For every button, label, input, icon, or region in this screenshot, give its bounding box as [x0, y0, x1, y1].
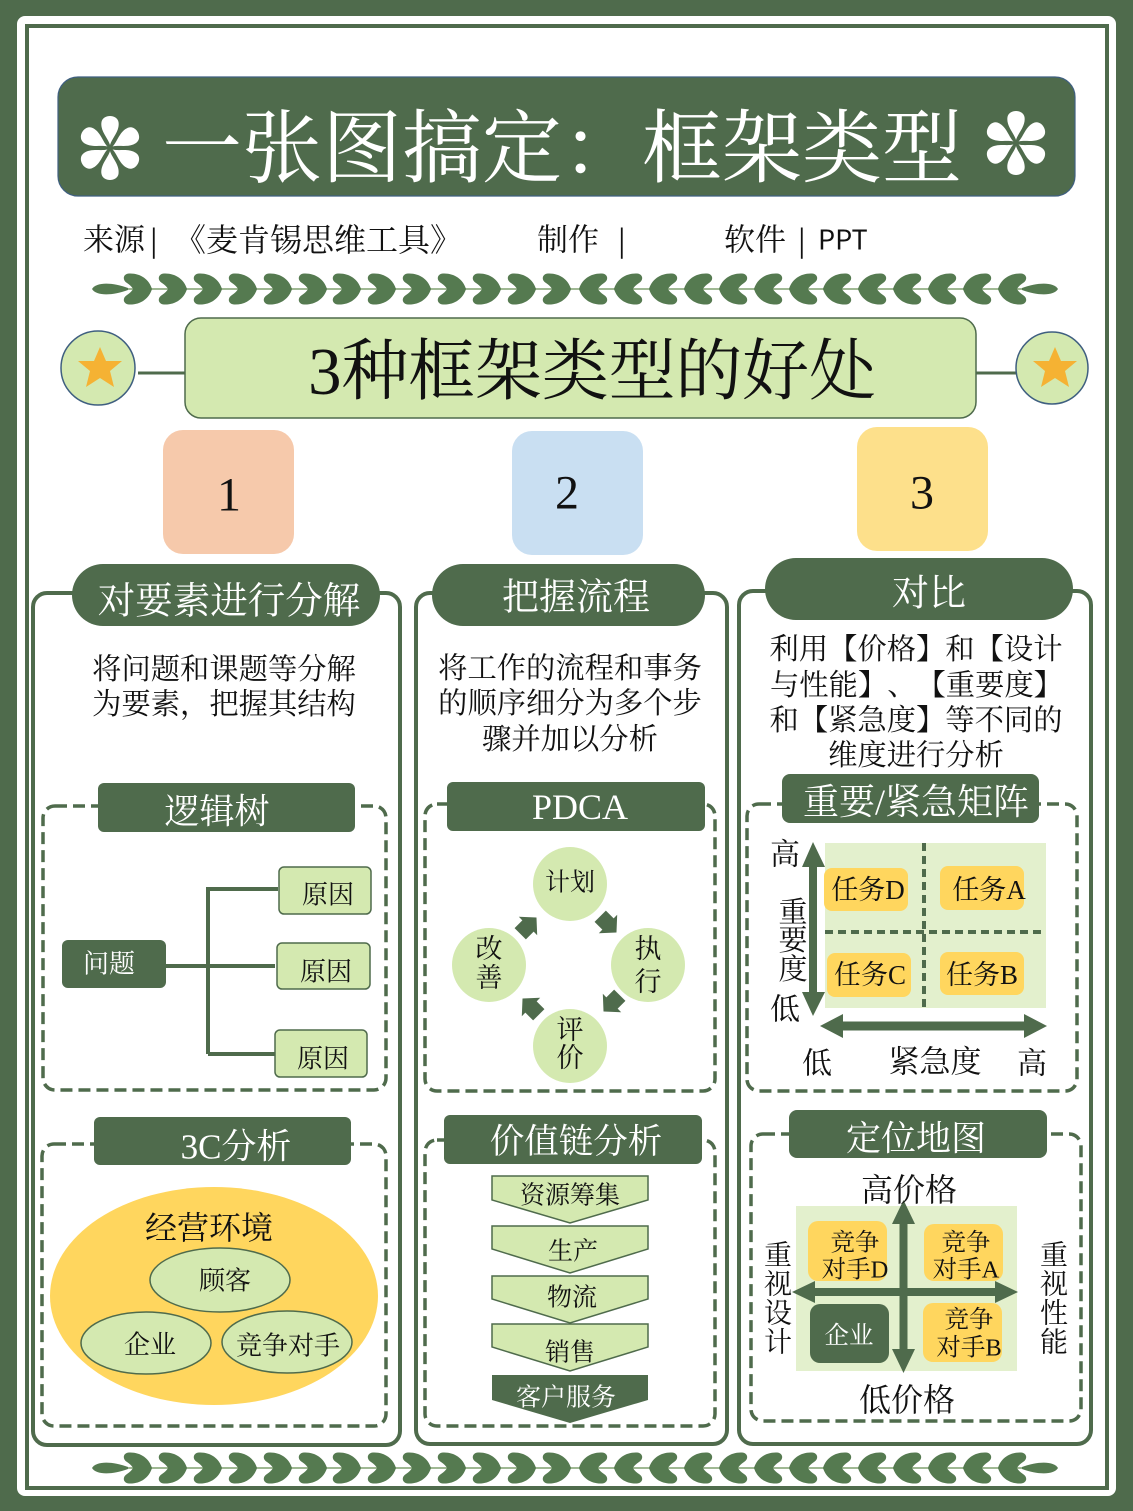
matrix heading: 重要/紧急矩阵 [803, 782, 1029, 822]
environment ellipse [50, 1187, 378, 1405]
pill heading 1 [72, 564, 380, 626]
competitor D: 竞争 [830, 1228, 880, 1256]
node 1 [279, 867, 371, 914]
divider vine top [92, 273, 1058, 305]
number 2 [512, 431, 643, 555]
vertical axis arrow [892, 1200, 915, 1373]
act: 改 [476, 934, 502, 964]
task D: 任务D [831, 875, 905, 905]
source line: 《麦肯锡思维工具》 [174, 222, 462, 258]
map labels: 视 [1040, 1268, 1068, 1300]
act [452, 928, 526, 1002]
axis labels: 紧急度 [888, 1044, 982, 1080]
step 3: 物流 [547, 1284, 597, 1312]
description 1: 为要素，把握其结构 [92, 688, 356, 721]
check: 价 [556, 1043, 584, 1073]
company [81, 1312, 211, 1374]
vertical axis arrow [802, 842, 825, 1016]
horizontal axis arrow [820, 1014, 1047, 1038]
description 2 [438, 652, 702, 756]
step 4 [492, 1324, 648, 1371]
value chain heading: 价值链分析 [490, 1123, 662, 1161]
icon: left star [61, 331, 135, 405]
source line: PPT [818, 218, 868, 258]
pill heading 1: 对要素进行分解 [98, 580, 360, 622]
node 2: 原因 [300, 958, 352, 986]
source line [83, 218, 868, 260]
description 1: 将问题和课题等分解 [92, 653, 356, 686]
step 4: 销售 [545, 1338, 595, 1366]
node 1: 原因 [302, 880, 354, 910]
axis labels: 度 [778, 953, 808, 986]
description 2: 的顺序细分为多个步 [438, 687, 702, 720]
logic tree [43, 783, 386, 1090]
cycle arrows [511, 907, 629, 1024]
act: 善 [476, 963, 502, 993]
root node: 问题 [83, 950, 135, 978]
axis labels: 低 [802, 1048, 832, 1080]
horizontal axis arrow [792, 1281, 1018, 1303]
task C: 任务C [834, 960, 906, 990]
number 2: 2 [555, 466, 579, 520]
axis labels: 重 [778, 896, 808, 929]
importance urgency matrix [747, 774, 1077, 1091]
environment ellipse: 经营环境 [145, 1210, 273, 1246]
icon: right flower [984, 111, 1048, 175]
competitor [222, 1311, 352, 1373]
matrix background [825, 843, 1046, 1008]
task B: 任务B [946, 960, 1018, 990]
map heading [789, 1110, 1047, 1158]
subtitle banner [138, 318, 1017, 418]
step 1 [492, 1176, 648, 1223]
axis labels [770, 838, 1047, 1080]
3C analysis [42, 1117, 386, 1426]
logic tree heading [98, 783, 355, 832]
source line: | [150, 220, 158, 260]
axis labels: 低 [770, 994, 800, 1026]
task C [827, 953, 911, 997]
logic tree heading: 逻辑树 [164, 792, 270, 832]
source line: 软件 [724, 222, 786, 258]
source line: | [798, 220, 806, 260]
plan [533, 847, 607, 921]
map background [796, 1206, 1017, 1371]
description 3: 利用【价格】和【设计 [770, 633, 1062, 666]
task D [824, 868, 908, 911]
map labels: 重 [764, 1240, 792, 1272]
source line: 制作 [537, 222, 599, 258]
node 2 [277, 943, 370, 989]
axis labels: 高 [1017, 1048, 1047, 1080]
customer: 顾客 [199, 1266, 251, 1296]
tree connectors [166, 889, 278, 1054]
competitor A: 竞争 [942, 1228, 990, 1256]
competitor B: 对手B [936, 1334, 1002, 1362]
map labels: 高价格 [861, 1172, 957, 1208]
PDCA cycle [425, 782, 715, 1091]
competitor D: 对手D [822, 1256, 888, 1284]
description 3: 与性能】、【重要度】 [770, 669, 1063, 702]
3C heading: 3C分析 [181, 1128, 291, 1166]
axis labels: 要 [778, 925, 808, 957]
source line: 来源 [83, 222, 146, 258]
do: 行 [634, 967, 662, 997]
title banner [58, 77, 1075, 196]
divider vine bottom [92, 1452, 1058, 1484]
competitor B: 竞争 [944, 1306, 994, 1334]
map labels: 视 [764, 1268, 792, 1300]
customer [150, 1248, 290, 1312]
pill heading 3 [765, 558, 1073, 620]
do: 执 [634, 934, 662, 964]
panel: column 2 [416, 564, 727, 1444]
task A [940, 866, 1026, 910]
description 1 [92, 653, 356, 721]
panel: column 3 [739, 558, 1091, 1444]
step 2 [492, 1226, 648, 1273]
map heading: 定位地图 [846, 1120, 986, 1158]
node 3 [275, 1030, 367, 1077]
check [533, 1009, 607, 1083]
do [611, 928, 685, 1002]
description 2: 将工作的流程和事务 [438, 652, 702, 685]
task B [940, 952, 1024, 995]
company: 企业 [824, 1322, 874, 1350]
step 2: 生产 [548, 1238, 598, 1266]
icon: right star [1016, 332, 1088, 404]
description 2: 骤并加以分析 [482, 723, 658, 756]
number 1: 1 [217, 468, 241, 522]
matrix dividers [825, 843, 1046, 1008]
panel: column 1 [33, 564, 400, 1445]
axis labels: 高 [770, 838, 800, 872]
PDCA heading [447, 782, 705, 831]
check: 评 [556, 1015, 584, 1045]
title text: 一张图搞定：框架类型 [162, 106, 962, 194]
map labels: 设 [764, 1298, 792, 1330]
node 3: 原因 [297, 1044, 349, 1074]
company: 企业 [124, 1330, 176, 1360]
competitor A [924, 1224, 1003, 1284]
competitor B [923, 1303, 1002, 1362]
competitor: 竞争对手 [236, 1332, 340, 1360]
map labels: 性 [1040, 1298, 1068, 1330]
pill heading 2: 把握流程 [502, 576, 650, 618]
number 1 [163, 430, 294, 554]
root node [62, 940, 166, 988]
value chain heading [444, 1115, 702, 1164]
icon: left flower [78, 116, 142, 180]
source line: | [618, 220, 626, 260]
description 3: 和【紧急度】等不同的 [770, 704, 1062, 737]
pill heading 2 [432, 564, 705, 626]
map labels: 低价格 [859, 1382, 955, 1418]
step 1: 资源筹集 [520, 1182, 620, 1210]
plan: 计划 [545, 868, 595, 896]
step 5: 客户服务 [516, 1384, 616, 1412]
PDCA heading: PDCA [532, 787, 628, 827]
step 3 [492, 1276, 648, 1323]
map labels: 计 [764, 1326, 792, 1358]
subtitle text: 3种框架类型的好处 [308, 335, 876, 409]
positioning map [751, 1110, 1081, 1421]
map labels [764, 1172, 1068, 1418]
description 3 [770, 633, 1063, 772]
pill heading 3: 对比 [892, 574, 966, 614]
company [810, 1304, 889, 1363]
number 3 [857, 427, 988, 551]
map labels: 重 [1040, 1240, 1068, 1272]
competitor D [808, 1221, 888, 1284]
3C heading [94, 1117, 351, 1166]
competitor A: 对手A [933, 1256, 1000, 1284]
value chain [425, 1115, 715, 1426]
task A: 任务A [952, 875, 1026, 905]
description 3: 维度进行分析 [828, 739, 1004, 772]
map labels: 能 [1040, 1326, 1068, 1358]
number 3: 3 [910, 466, 934, 520]
step 5 [492, 1375, 648, 1423]
